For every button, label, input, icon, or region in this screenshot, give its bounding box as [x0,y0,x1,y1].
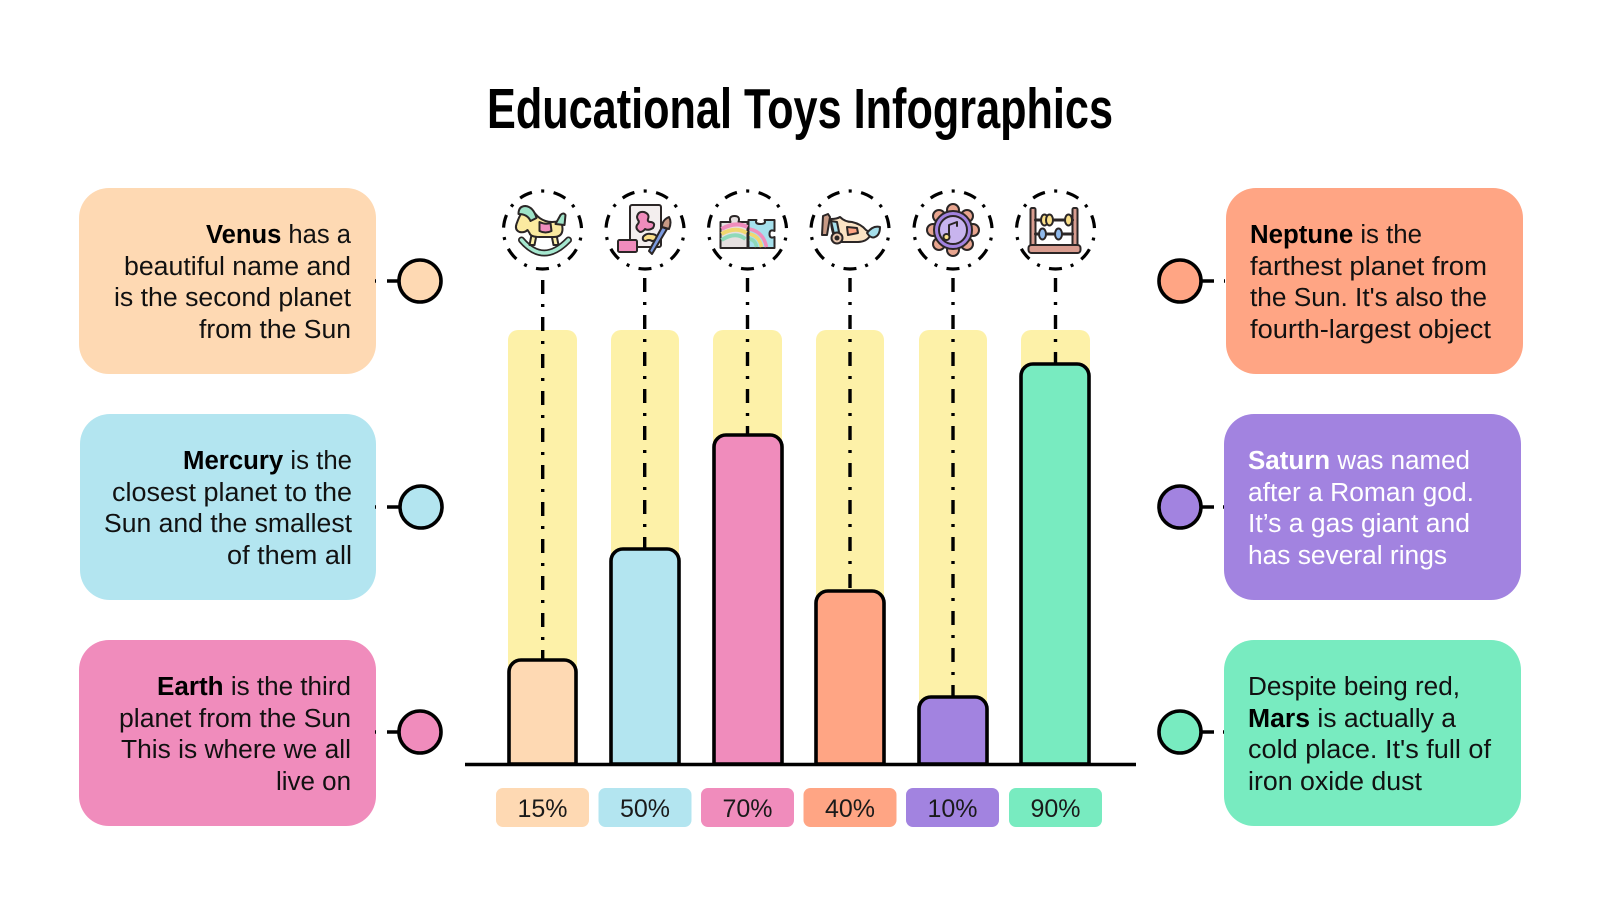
text: Earth: live on [276,768,351,796]
text: Earth [119,673,351,796]
icon: tambourine [908,185,998,275]
bar track: Mars [1021,330,1090,764]
text: Mercury: closest planet to the [112,479,352,507]
bar track: Mercury [611,330,679,764]
text: Venus: beautiful name and [124,253,351,281]
icon: puzzle [703,185,792,275]
panel: Saturn [1224,414,1521,600]
panel: Earth [79,640,376,826]
bar: 70% [714,435,782,764]
panel: Mars [1224,640,1521,826]
text: Mars: cold place. It's full of [1248,736,1492,764]
text: Neptune: farthest planet from [1250,253,1487,281]
text: Saturn: has several rings [1248,542,1447,570]
text: Mars [1248,673,1492,796]
text: Earth: This is where we all [121,736,351,764]
value label: 50% [598,788,692,827]
bar: 90% [1021,364,1089,764]
text: Neptune: the Sun. It's also the [1250,284,1487,312]
connector: Neptune [1159,260,1225,302]
connector: Earth [375,711,441,753]
text: Neptune: fourth-largest object [1250,316,1491,344]
value label: 40% [804,788,896,827]
bar: 15% [509,660,576,764]
text: Mars: Mars is actually a [1248,705,1457,733]
leader line: painting [643,278,646,549]
text: Mercury: Mercury is the [183,447,352,475]
panel: Neptune [1226,188,1523,374]
bar: 10% [919,697,987,764]
value label: 10% [906,788,999,827]
connector: Mercury [375,486,442,528]
value label: 90% [1009,788,1102,827]
bar track: Saturn [919,330,987,764]
panel: Mercury [80,414,376,600]
connector: Venus [375,260,441,302]
axis baseline [465,763,1136,766]
bar chart [465,278,1136,764]
text: Neptune [1250,221,1491,344]
bar track: Neptune [816,330,884,764]
bar: 40% [816,591,884,764]
leader line: puzzle [746,278,749,435]
icon: rocking horse [498,185,587,275]
leader line: tambourine [951,278,955,697]
text: Mercury: of them all [227,542,352,570]
leader line: abacus [1054,278,1057,364]
bar track: Venus [508,330,577,764]
text: Venus: from the Sun [199,316,351,344]
text: Saturn: Saturn was named [1248,447,1470,475]
text: Earth: Earth is the third [157,673,351,701]
text: Saturn: after a Roman god. [1248,479,1474,507]
icon: painting [600,185,690,275]
bar track: Earth [713,330,782,764]
leader line: plane [848,278,852,591]
title: Educational Toys Infographics [487,77,1113,141]
text: Saturn: It’s a gas giant and [1248,510,1470,538]
text: Mercury [104,447,352,570]
text: Saturn [1248,447,1474,570]
icon: plane [805,185,895,275]
value label: 15% [496,788,589,827]
text: Venus [114,221,352,344]
text: Neptune: Neptune is the [1250,221,1422,249]
icon: abacus [1011,185,1100,275]
text: Mercury: Sun and the smallest [104,510,352,538]
panel: Venus [79,188,376,374]
text: Earth: planet from the Sun [119,705,351,733]
text: Mars: iron oxide dust [1248,768,1422,796]
value label: 50%: 50% [620,795,670,823]
value label: 40%: 40% [825,795,875,823]
value label: 90%: 90% [1030,795,1081,823]
value label: 10%: 10% [927,795,978,823]
value label: 70%: 70% [722,795,773,823]
value label: 15%: 15% [517,795,568,823]
text: Mars: Despite being red, [1248,673,1460,701]
bar: 50% [611,549,679,764]
leader line: rocking horse [541,280,544,660]
connector: Saturn [1159,486,1224,528]
value label: 70% [701,788,794,827]
connector: Mars [1159,711,1224,753]
text: Venus: is the second planet [114,284,351,312]
text: Venus: Venus has a [206,221,352,249]
